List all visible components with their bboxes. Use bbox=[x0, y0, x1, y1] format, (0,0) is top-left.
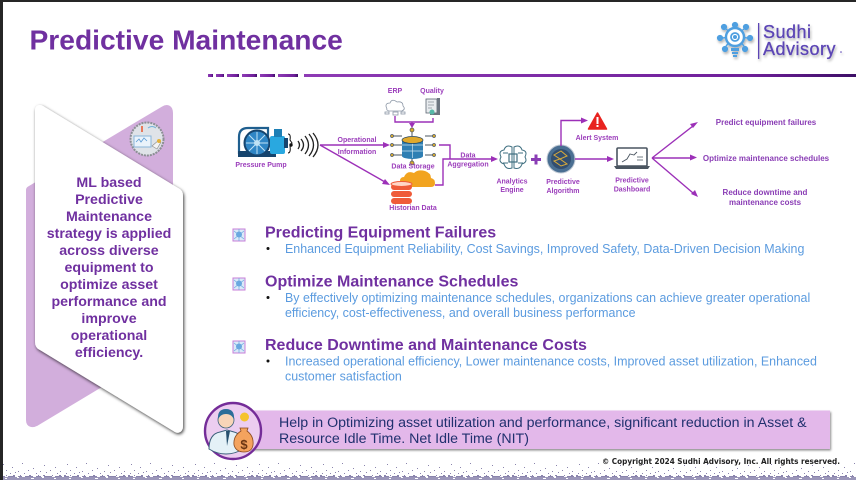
bullet text: customer satisfaction bbox=[285, 370, 402, 384]
connector: storage and historian merge bbox=[435, 145, 450, 185]
header rule bbox=[208, 74, 856, 77]
back shape bbox=[30, 109, 169, 423]
arrow: to data storage bbox=[320, 142, 390, 148]
connector: sources to storage bbox=[395, 116, 433, 128]
side text: performance and bbox=[51, 294, 167, 310]
outcome: reduce downtime: Reduce downtime and bbox=[723, 188, 808, 197]
icon: predictive algorithm bbox=[547, 145, 575, 173]
label: operational information: Information bbox=[338, 149, 376, 156]
label: predictive dashboard: Dashboard bbox=[614, 186, 650, 194]
label: operational information: Operational bbox=[338, 137, 376, 144]
icon: bulb badge bbox=[233, 278, 245, 290]
label: quality: Quality bbox=[420, 88, 444, 95]
icon: quality document bbox=[426, 98, 440, 115]
label: ERP: ERP bbox=[388, 88, 403, 95]
heading: Optimize Maintenance Schedules bbox=[265, 274, 518, 290]
icon: analytics engine brain bbox=[500, 146, 526, 168]
side text: equipment to bbox=[64, 260, 154, 276]
title: Predictive Maintenance bbox=[30, 24, 343, 56]
label: data storage: Data Storage bbox=[391, 164, 435, 170]
icon: advisor with money bag: $ bbox=[240, 437, 248, 452]
heading: Predicting Equipment Failures bbox=[265, 224, 496, 242]
side text: ML based bbox=[76, 175, 142, 191]
side text: strategy is applied bbox=[47, 226, 171, 242]
logo: Sudhi Advisory bbox=[717, 22, 842, 59]
front card bbox=[39, 109, 179, 429]
section: reduce downtime and maintenance costs bbox=[233, 337, 817, 384]
arrow: to historian bbox=[320, 145, 390, 185]
side text: operational bbox=[71, 328, 147, 344]
banner bar bbox=[232, 410, 830, 449]
logo divider bbox=[758, 23, 759, 59]
label: predictive dashboard: Predictive bbox=[615, 178, 649, 184]
logo wordmark: Advisory bbox=[763, 39, 836, 59]
label: alert system: Alert System bbox=[576, 135, 618, 142]
outcome: optimize maintenance schedules: Optimize maintenance schedules bbox=[703, 154, 830, 163]
banner text: Help in Optimizing asset utilization and performance, significant reduction in Asset & bbox=[279, 415, 807, 431]
logo wordmark bbox=[763, 22, 842, 59]
icon: historian cloud database bbox=[391, 170, 435, 204]
label: pressure pump: Pressure Pump bbox=[235, 162, 287, 169]
icon: bulb badge bbox=[233, 229, 245, 241]
icon: predictive dashboard bbox=[614, 148, 650, 169]
bullet text: Increased operational efficiency, Lower maintenance costs, Improved asset utilization, Enhanced bbox=[285, 354, 817, 368]
icon: pressure pump bbox=[238, 128, 293, 157]
section: optimize maintenance schedules bbox=[233, 274, 810, 320]
copyright: © Copyright 2024 Sudhi Advisory, Inc. All rights reserved. bbox=[602, 457, 840, 466]
icon: advisor with money bag bbox=[205, 403, 261, 459]
side text: optimize asset bbox=[60, 277, 158, 293]
label: analytics engine: Engine bbox=[500, 187, 524, 194]
bullet text: efficiency, cost-effectiveness, and overall business performance bbox=[285, 306, 636, 320]
label: predictive algorithm: Algorithm bbox=[546, 188, 580, 195]
label: data aggregation: Data bbox=[460, 152, 476, 160]
label: analytics engine: Analytics bbox=[496, 178, 528, 186]
bullet text: By effectively optimizing maintenance schedules, organizations can achieve greater operational bbox=[285, 291, 810, 305]
icon: logo light bulb bbox=[717, 22, 753, 57]
outcome: predict equipment failures: Predict equipment failures bbox=[716, 118, 817, 127]
side text: Maintenance bbox=[66, 209, 152, 225]
label: predictive algorithm: Predictive bbox=[546, 179, 580, 186]
icon: data storage bbox=[390, 128, 436, 165]
icon: alert triangle bbox=[588, 113, 606, 129]
logo wordmark: Sudhi bbox=[763, 22, 812, 42]
side text: Predictive bbox=[75, 192, 143, 208]
label: data aggregation: Aggregation bbox=[447, 162, 489, 168]
outcome: reduce downtime: maintenance costs bbox=[729, 198, 802, 207]
side text: efficiency. bbox=[75, 345, 143, 361]
icon: bulb badge bbox=[233, 341, 245, 353]
bullet text bbox=[266, 291, 810, 320]
banner text: Resource Idle Time. Net Idle Time (NIT) bbox=[279, 431, 529, 447]
icon: plus bbox=[531, 154, 541, 164]
icon: monitoring badge bbox=[130, 122, 164, 156]
arrow: to alert system bbox=[561, 118, 588, 146]
side text: improve bbox=[81, 311, 137, 327]
footer dotted band bbox=[3, 462, 856, 480]
label: historian data: Historian Data bbox=[389, 205, 437, 212]
bullet text bbox=[266, 354, 817, 384]
side text: across diverse bbox=[59, 243, 159, 259]
icon: signal waves bbox=[298, 133, 318, 157]
arrow: to analytics engine bbox=[450, 156, 498, 162]
section: predicting equipment failures bbox=[233, 224, 804, 256]
callout banner bbox=[205, 403, 830, 459]
arrow: to dashboard bbox=[575, 156, 614, 162]
icon: ERP cloud bbox=[385, 100, 405, 115]
heading: Reduce Downtime and Maintenance Costs bbox=[265, 337, 587, 354]
arrows: three outcomes bbox=[652, 122, 698, 197]
flow diagram bbox=[235, 88, 830, 212]
panel: left summary bbox=[30, 109, 179, 429]
bullet text: Enhanced Equipment Reliability, Cost Savings, Improved Safety, Data-Driven Decision Making bbox=[285, 242, 804, 256]
